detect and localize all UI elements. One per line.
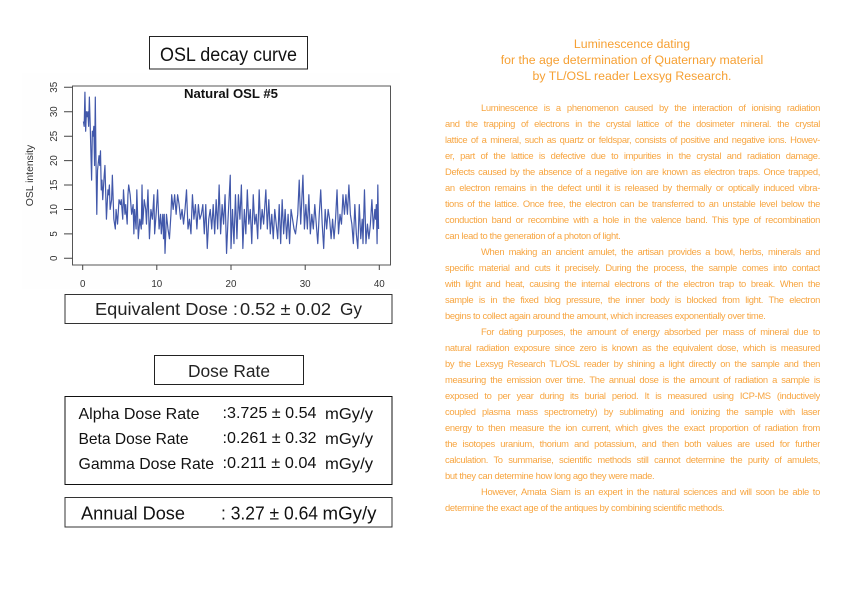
chart frame [72, 86, 390, 265]
y axis tick labels: 0 [49, 255, 60, 261]
beta dose rate: mGy/y [325, 431, 373, 448]
x axis tick labels [80, 279, 385, 290]
text block: body text: Luminescence is a phenomenon caused by the interaction of ionising radiation [481, 102, 820, 113]
text block: body text: When making an ancient amulet, the artisan provides a bowl, herbs, minerals and [481, 246, 820, 257]
y axis tick labels: 30 [49, 106, 60, 117]
gamma dose rate [78, 455, 373, 473]
panel: equivalent dose: 0.52 ± 0.02 [240, 299, 331, 319]
panel: annual dose [65, 498, 392, 527]
y axis tick labels: 35 [49, 81, 60, 93]
beta dose rate: :0.261 ± 0.32 [222, 430, 317, 447]
heading: OSL decay curve: OSL decay curve [160, 45, 297, 66]
x axis tick labels: 30 [300, 279, 311, 290]
y axis tick labels: 15 [49, 179, 60, 190]
panel: dose rates [65, 396, 392, 484]
x axis tick labels: 20 [226, 279, 237, 290]
alpha dose rate [78, 405, 373, 423]
text block: body text [445, 102, 820, 513]
text block: body text: energy to then measure the ion current, which gives the exact proportion of radiation from [445, 422, 820, 433]
y axis tick labels: 25 [49, 130, 60, 142]
text block: body text: can lead to the generation of a photon of light. [445, 230, 620, 241]
y axis tick labels: 10 [49, 204, 60, 215]
heading: dose rate [154, 356, 304, 384]
text block: body text: with light and heat, causing the internal electrons of the electron trap to break. When the [445, 278, 820, 289]
panel: annual dose: : 3.27 ± 0.64 [221, 504, 318, 524]
beta dose rate: Beta Dose Rate [78, 431, 189, 448]
panel: annual dose: mGy/y [322, 504, 376, 524]
text block: body text: natural radiation exposure since zero is known as the equivalent dose, which is measured [445, 342, 820, 353]
y axis tick labels [49, 81, 60, 261]
text block: body text: measuring the emission over time. The annual dose is the amount of radiation a sample is [445, 374, 820, 385]
text block: body text: an electron remains in the defect until it is released by thermally or optically induced vibra- [445, 182, 820, 193]
alpha dose rate: Alpha Dose Rate [78, 406, 200, 423]
title: Luminescence dating [574, 37, 690, 51]
panel: annual dose: Annual Dose [81, 504, 185, 524]
text block: body text: tions of the lattice. Once free, the electron can be transferred to an unstable level below the [445, 198, 820, 209]
y axis label: OSL intensity [25, 144, 36, 206]
heading: dose rate: Dose Rate [188, 361, 270, 381]
alpha dose rate: mGy/y [325, 406, 373, 423]
beta dose rate [78, 430, 373, 448]
panel: equivalent dose: Gy [340, 299, 362, 319]
text block: body text: coupled plasma mass spectrometry) by sublimating and ionizing the sample with laser [445, 406, 820, 417]
text block: body text: For dating purposes, the amount of energy absorbed per mass of mineral due to [481, 326, 820, 337]
data line [83, 92, 379, 253]
y axis tick labels: 5 [49, 231, 60, 237]
text block: body text: specific material and cuts it precisely. During the process, the sample comes into contact [445, 262, 820, 273]
text block: body text: However, Amata Siam is an expert in the natural sciences and will soon be able to [481, 486, 820, 497]
gamma dose rate: Gamma Dose Rate [78, 456, 214, 473]
text block: body text: begins to collect again around the amount, which increases exponentially over time. [445, 310, 766, 321]
text block: body text: by the Lexsyg Research TL/OSL reader by shining a light directly on the sample and then [445, 358, 820, 369]
panel: equivalent dose: Equivalent Dose : [95, 299, 238, 319]
text block: body text: determine the exact age of the antiques by combining scientific methods. [445, 502, 724, 513]
y axis tick labels: 20 [49, 155, 60, 166]
title: by TL/OSL reader Lexsyg Research. [533, 69, 731, 83]
panel: equivalent dose [65, 294, 392, 324]
chart title: Natural OSL #5 [184, 87, 278, 101]
alpha dose rate: :3.725 ± 0.54 [222, 405, 317, 422]
text block: body text: er, part of the lattice is defective due to impurities in the crystal and radiation damage. [445, 150, 820, 161]
gamma dose rate: :0.211 ± 0.04 [222, 455, 317, 472]
title [500, 37, 763, 83]
chart: OSL decay line chart [22, 73, 400, 290]
x axis tick labels: 0 [80, 279, 86, 290]
x axis tick labels: 10 [151, 279, 163, 290]
text block: body text: and the trapping of electrons in the crystal lattice of the dosimeter mineral. the crystal [445, 118, 820, 129]
text block: body text: the isotopes uranium, thorium and potassium, and then both values are used for further [445, 438, 820, 449]
text block: body text: exposed to per year during its burial period. It is measured using ICP-MS (inductively [445, 390, 820, 401]
y axis [64, 87, 379, 270]
text block: body text: Defects caused by the absence of a negative ion are known as electron traps. Once trapped, [445, 166, 820, 177]
text block: body text: sample is in the fixed blog pressure, the inner body is blocked from light. The electron [445, 294, 820, 305]
x axis tick labels: 40 [374, 279, 385, 290]
heading: OSL decay curve [150, 36, 308, 69]
text block: body text: lattice of a mineral, such as quartz or feldspar, consists of positive and negative ions. Howev- [445, 134, 820, 145]
text block: body text: but they can determine how long ago they were made. [445, 470, 654, 481]
title: for the age determination of Quaternary material [501, 53, 763, 67]
text block: body text: conduction band or recombine with a hole in the valence band. This type of recombination [445, 214, 820, 225]
gamma dose rate: mGy/y [325, 456, 373, 473]
text block: body text: calculation. To summarise, scientific methods still cannot determine the purity of amulets, [445, 454, 820, 465]
